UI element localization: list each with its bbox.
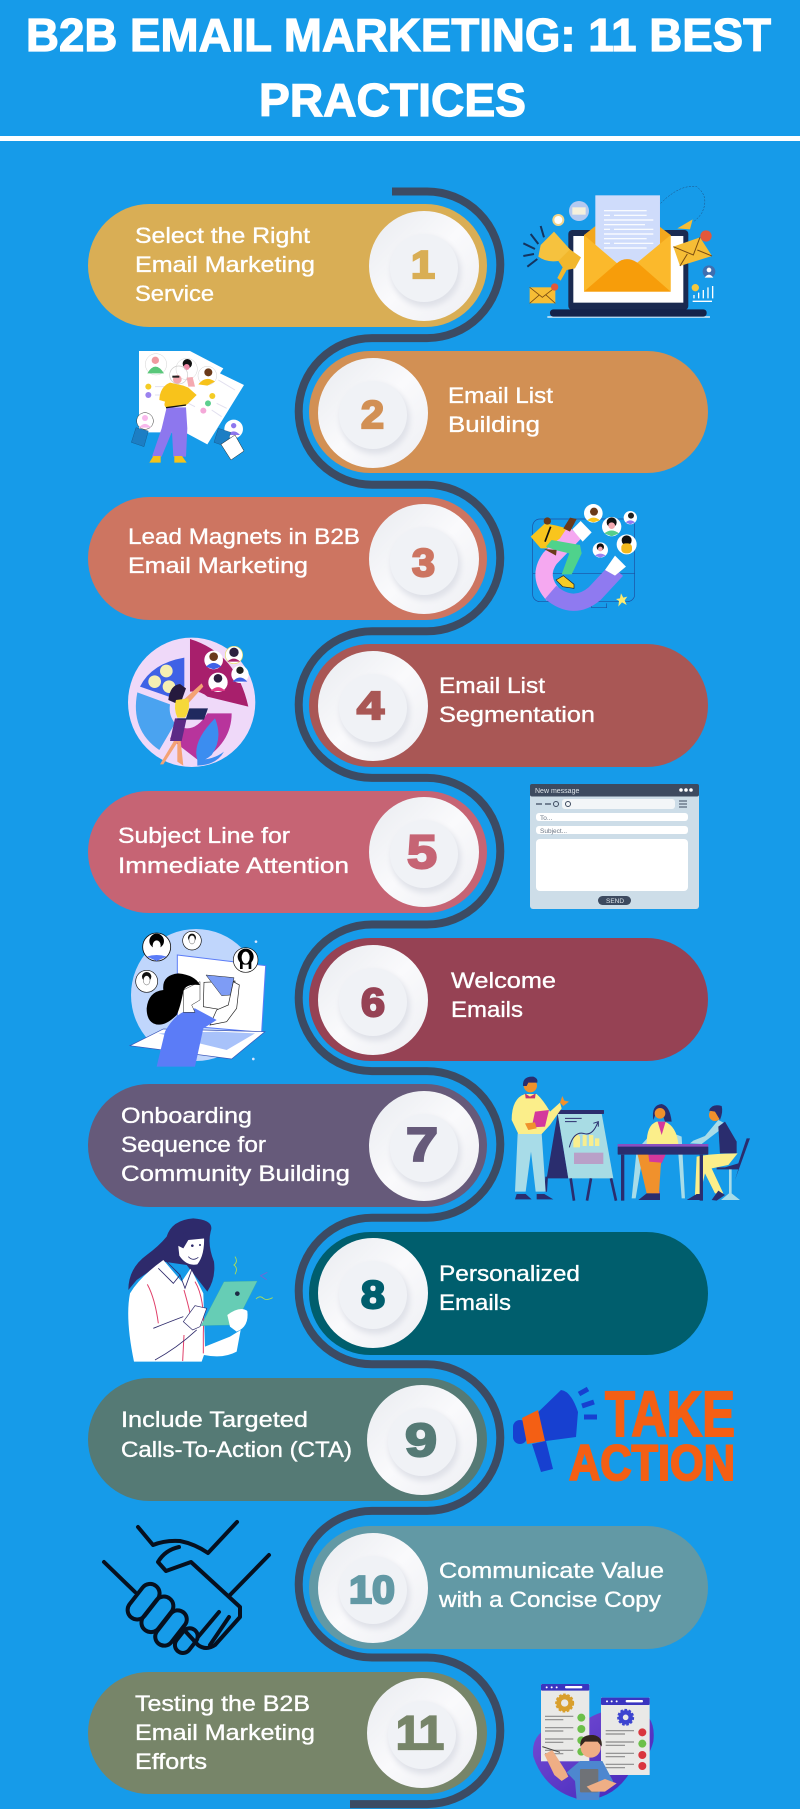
step 2 [309, 351, 708, 473]
step 9 [88, 1378, 487, 1501]
illustration: new message email form: Subject... [540, 828, 567, 835]
label: Welcome [451, 968, 556, 993]
illustration: team meeting with flip chart [512, 1077, 750, 1201]
illustration: new message email form: New message [535, 788, 579, 795]
pill [88, 1672, 487, 1794]
label: Subject Line for [118, 823, 290, 848]
label: Emails [451, 997, 523, 1022]
step 8 [309, 1232, 708, 1355]
label: Include Targeted [121, 1407, 308, 1432]
label [128, 524, 360, 578]
number badge: 5 [407, 825, 437, 878]
illustration: take action megaphone: TAKE [605, 1378, 735, 1450]
number badge [369, 797, 479, 907]
step 6 [309, 938, 708, 1061]
label: Immediate Attention [118, 853, 349, 878]
pill [309, 938, 708, 1061]
label: Testing the B2B [135, 1691, 310, 1716]
label: Email Marketing [135, 1720, 315, 1745]
number badge: 7 [406, 1118, 438, 1171]
illustration: segmentation pie chart [128, 638, 255, 767]
pill [309, 351, 708, 473]
number badge: 3 [412, 542, 435, 585]
label: Select the Right [135, 223, 310, 248]
number badge [318, 1238, 428, 1348]
pill [309, 1232, 708, 1355]
pill [309, 1526, 708, 1649]
illustration: new message email form [530, 784, 699, 909]
number badge: 11 [396, 1706, 444, 1759]
label: Email Marketing [135, 252, 315, 277]
label [439, 673, 595, 727]
pill [88, 204, 487, 327]
label: Calls-To-Action (CTA) [121, 1437, 352, 1462]
label: Personalized [439, 1261, 580, 1286]
label [448, 383, 553, 437]
illustration: take action megaphone [513, 1378, 735, 1491]
illustration: email on laptop [523, 186, 715, 317]
pill [309, 644, 708, 767]
number badge [367, 1385, 477, 1495]
number badge: 10 [349, 1569, 395, 1612]
step 4 [309, 644, 708, 767]
number badge: 6 [361, 981, 385, 1025]
number badge: 9 [405, 1414, 437, 1466]
illustration: testing checklists [533, 1684, 654, 1800]
label [118, 823, 349, 878]
number badge: 1 [411, 244, 435, 287]
illustration: woman with tablet [128, 1218, 273, 1362]
label [135, 223, 315, 306]
number badge [369, 1091, 479, 1201]
step 7 [88, 1084, 487, 1207]
illustration: handshake [104, 1522, 269, 1656]
label: Sequence for [121, 1132, 266, 1157]
step 3 [88, 497, 487, 620]
label [121, 1103, 350, 1186]
illustration: new message email form: SEND [606, 898, 624, 905]
label: with a Concise Copy [438, 1587, 661, 1612]
illustration: take action megaphone: ACTION [569, 1435, 735, 1491]
number badge [318, 358, 428, 468]
label: Service [135, 281, 214, 306]
label: Onboarding [121, 1103, 252, 1128]
label: Communicate Value [439, 1558, 664, 1583]
number badge [318, 651, 428, 761]
illustration: woman at laptop with email [130, 929, 266, 1067]
number badge [369, 211, 479, 321]
step 11 [88, 1672, 487, 1794]
label [439, 1261, 580, 1315]
illustration: contact list papers [131, 351, 244, 463]
label [438, 1558, 664, 1612]
pill [88, 1084, 487, 1207]
illustration: new message email form: To... [540, 815, 552, 822]
step 1 [88, 204, 487, 327]
label [451, 968, 556, 1022]
pill [88, 791, 487, 913]
title: PRACTICES [259, 74, 526, 126]
label: Email Marketing [128, 553, 308, 578]
number badge: 4 [357, 685, 384, 728]
label [121, 1407, 352, 1462]
label: Email List [448, 383, 553, 408]
label [135, 1691, 315, 1774]
number badge: 8 [361, 1274, 385, 1317]
label: Lead Magnets in B2B [128, 524, 360, 549]
number badge [367, 1678, 477, 1788]
step 5 [88, 791, 487, 913]
label: Emails [439, 1290, 511, 1315]
step 10 [309, 1526, 708, 1649]
illustration: magnet [531, 504, 637, 608]
number badge [318, 1533, 428, 1643]
title: B2B EMAIL MARKETING: 11 BEST [26, 9, 771, 61]
serpentine connector line [299, 192, 500, 1804]
number badge [318, 945, 428, 1055]
number badge: 2 [361, 394, 384, 437]
label: Email List [439, 673, 545, 698]
label: Building [448, 412, 540, 437]
number badge [369, 504, 479, 614]
pill [88, 1378, 487, 1501]
label: Community Building [121, 1161, 350, 1186]
label: Segmentation [439, 702, 595, 727]
title [26, 9, 771, 126]
label: Efforts [135, 1749, 207, 1774]
pill [88, 497, 487, 620]
